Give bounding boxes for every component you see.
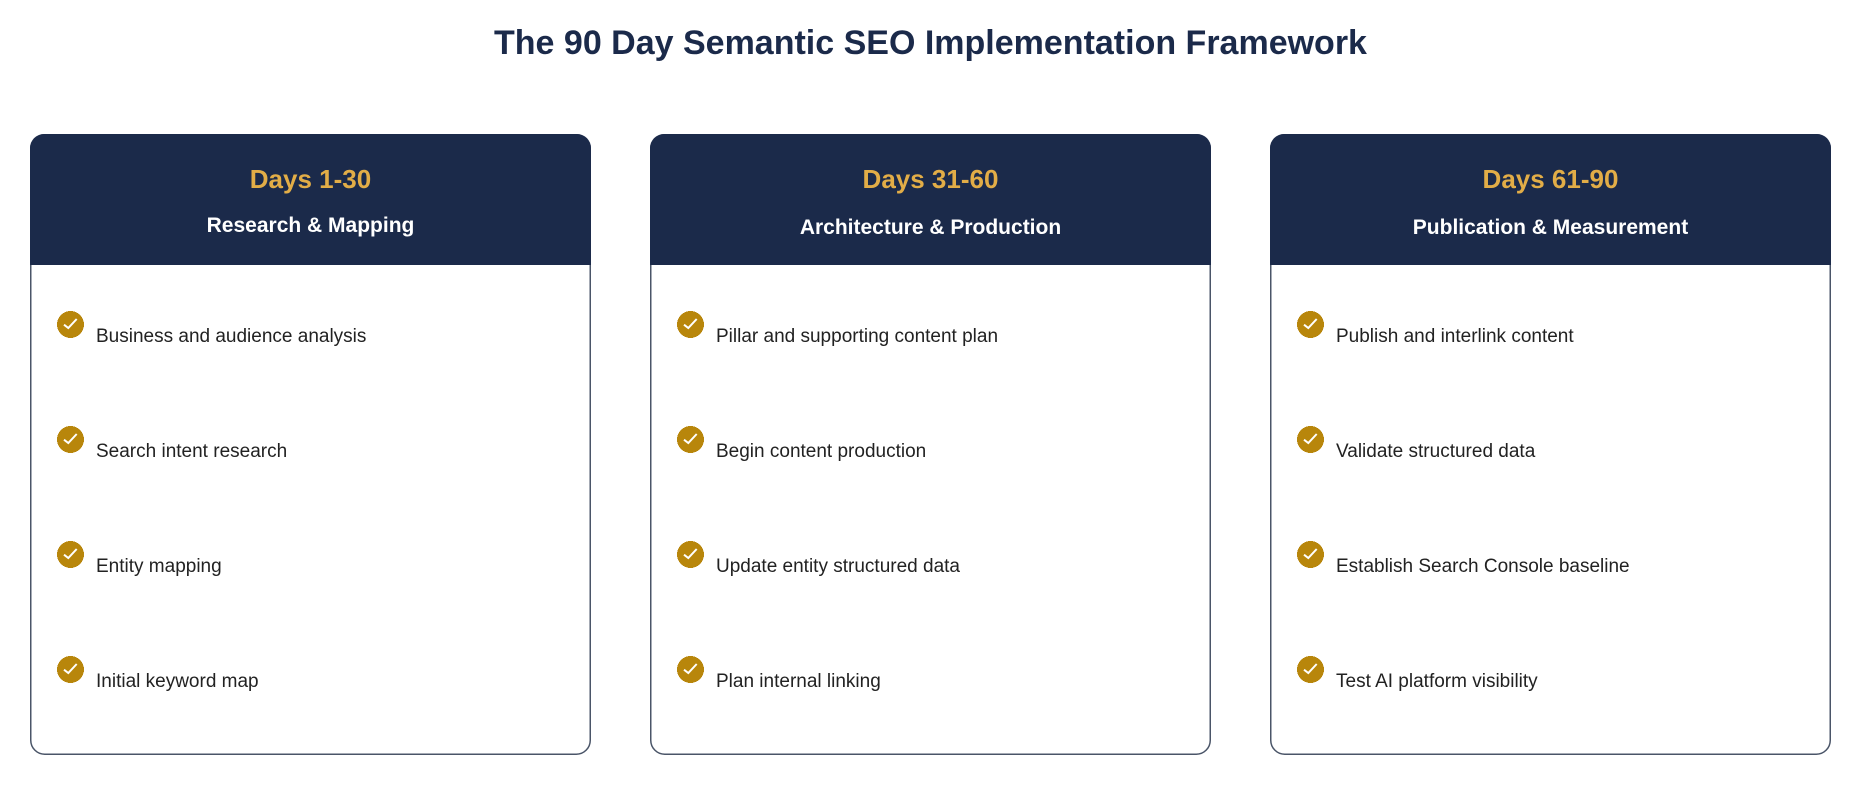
list item: Initial keyword map — [57, 656, 259, 692]
panel: Days 31-60 — [650, 134, 1211, 755]
subheading: Architecture & Production: Architecture & Production — [800, 216, 1061, 239]
title: The 90 Day Semantic SEO Implementation Framework — [494, 24, 1367, 62]
list item: Publish and interlink content: Publish and interlink content — [1336, 326, 1574, 347]
list item: Update entity structured data — [677, 541, 960, 577]
list item: Validate structured data — [1297, 426, 1536, 462]
subheading: Publication & Measurement: Publication & Measurement — [1413, 216, 1688, 239]
list item: Publish and interlink content — [1297, 311, 1574, 347]
panel header: Days 61-90 — [1270, 134, 1831, 265]
list item: Pillar and supporting content plan: Pillar and supporting content plan — [716, 326, 998, 347]
list item: Test AI platform visibility — [1297, 656, 1538, 692]
panel header: Days 31-60 — [650, 134, 1211, 265]
list item: Begin content production: Begin content production — [716, 441, 926, 462]
list item: Test AI platform visibility: Test AI platform visibility — [1336, 671, 1538, 692]
heading: Days 31-60: Days 31-60 — [863, 164, 998, 194]
list item: Update entity structured data: Update entity structured data — [716, 556, 960, 577]
list item: Entity mapping: Entity mapping — [96, 556, 222, 577]
list item: Plan internal linking — [677, 656, 881, 692]
panel header: Days 1-30 — [30, 134, 591, 265]
heading: Days 61-90: Days 61-90 — [1483, 164, 1618, 194]
list item: Establish Search Console baseline — [1297, 541, 1630, 577]
list item: Plan internal linking: Plan internal linking — [716, 671, 881, 692]
panel: Days 1-30 — [30, 134, 591, 755]
list item: Establish Search Console baseline: Establish Search Console baseline — [1336, 556, 1630, 577]
list item: Begin content production — [677, 426, 926, 462]
heading: Days 1-30: Days 1-30 — [250, 164, 371, 194]
list item: Pillar and supporting content plan — [677, 311, 998, 347]
subheading: Research & Mapping: Research & Mapping — [207, 214, 414, 237]
list item: Search intent research: Search intent research — [96, 441, 287, 462]
panel: Days 61-90 — [1270, 134, 1831, 755]
list item: Search intent research — [57, 426, 287, 462]
list item: Entity mapping — [57, 541, 222, 577]
list item: Initial keyword map: Initial keyword map — [96, 671, 259, 692]
list item: Validate structured data: Validate structured data — [1336, 441, 1535, 462]
list item: Business and audience analysis — [57, 311, 366, 347]
list item: Business and audience analysis: Business and audience analysis — [96, 326, 366, 347]
